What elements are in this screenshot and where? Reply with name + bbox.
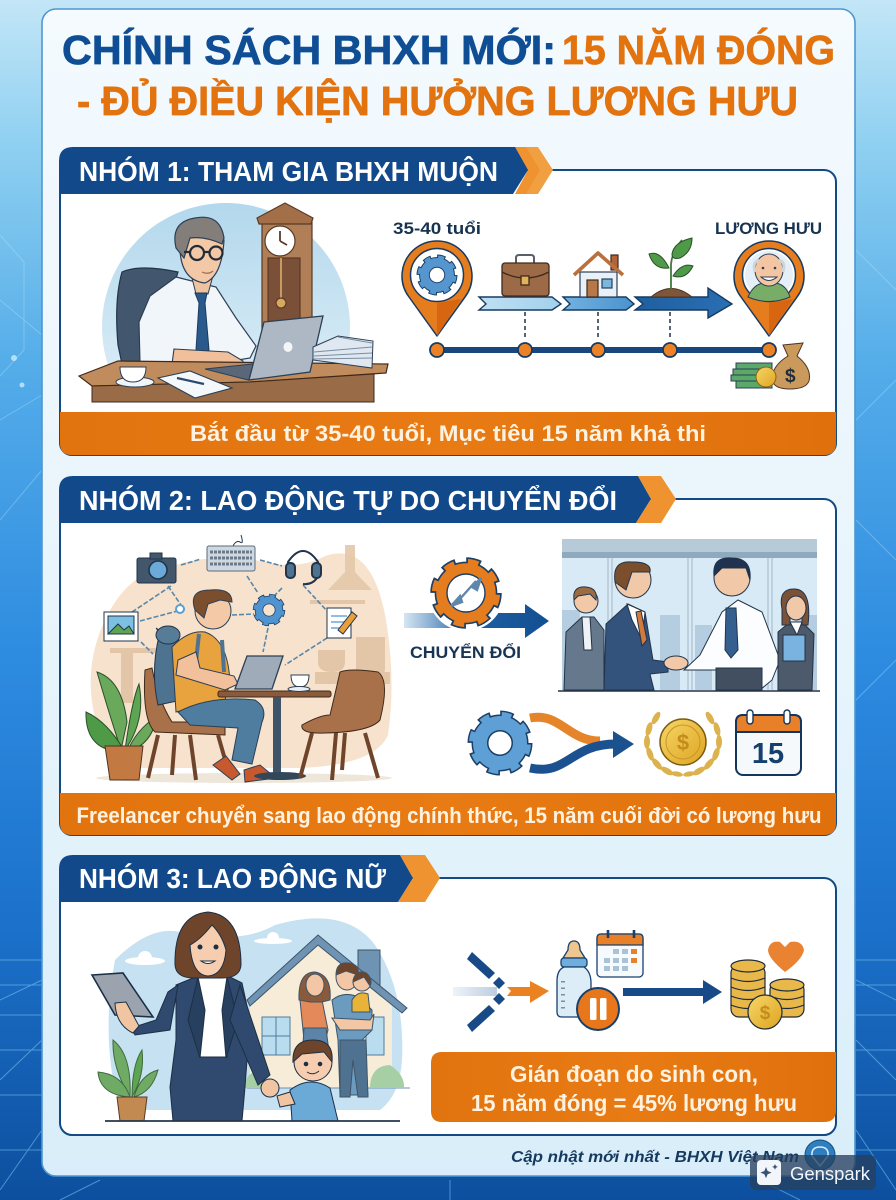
title: 15 NĂM ĐÓNG — [562, 27, 835, 73]
title: CHÍNH SÁCH BHXH MỚI: — [62, 27, 556, 73]
caption strip 1 — [60, 412, 836, 455]
watermark: genspark — [750, 1155, 876, 1190]
paper stack — [313, 336, 373, 368]
icon: gold coin with laurel — [644, 710, 722, 778]
plant — [98, 1040, 158, 1121]
dashed network — [132, 559, 328, 665]
header tab 1 — [59, 147, 553, 194]
coffee cup — [288, 675, 310, 692]
hand holding — [261, 1079, 279, 1097]
header tab 3: NHÓM 3: LAO ĐỘNG NỮ — [79, 862, 387, 894]
icon: gold coin with laurel: $ — [677, 730, 689, 755]
orange arrow — [507, 981, 549, 1003]
tablet — [92, 973, 153, 1017]
forearm — [172, 349, 243, 374]
notepad — [158, 371, 232, 398]
coffee cup — [116, 377, 154, 387]
arrow — [404, 604, 549, 638]
header tab 1: NHÓM 1: THAM GIA BHXH MUỘN — [79, 155, 498, 187]
clouds — [125, 932, 292, 965]
footer logo — [805, 1140, 835, 1170]
illustration: man at desk with clock — [78, 202, 389, 402]
caption box 3 — [431, 1052, 836, 1122]
chair — [117, 268, 178, 364]
shirt and torso — [139, 277, 256, 364]
jacket and skirt — [170, 976, 250, 1121]
label: lương hưu: LƯƠNG HƯU — [715, 219, 822, 238]
right arm — [230, 985, 270, 1085]
diverging lines — [467, 952, 505, 1032]
hair — [193, 590, 232, 618]
timeline line — [430, 343, 776, 357]
icon: coins and heart: $ — [760, 1003, 771, 1024]
icon: money and bag: $ — [785, 366, 796, 387]
left chair — [144, 668, 225, 735]
arm — [176, 652, 238, 690]
house — [245, 935, 410, 1088]
peach blob — [91, 553, 392, 768]
left arm — [131, 985, 178, 1035]
grandfather clock — [257, 203, 313, 334]
panel: nhóm 2 — [59, 476, 836, 835]
navy arrow — [623, 980, 722, 1004]
table — [218, 691, 331, 780]
icon: calendar 15: 15 — [752, 738, 784, 770]
blue blob — [109, 918, 402, 1110]
blouse — [198, 977, 227, 1057]
hub node — [176, 605, 184, 613]
panel: nhóm 1 — [59, 147, 836, 455]
icon: keyboard — [207, 535, 255, 571]
icon: house — [574, 253, 623, 297]
shoes — [213, 756, 240, 780]
boy — [277, 1040, 338, 1121]
illustration: working mother — [92, 912, 410, 1121]
label: chuyển đổi: CHUYỂN ĐỔI — [410, 643, 521, 662]
desk — [79, 361, 388, 386]
icon: gear — [256, 596, 282, 624]
icon: blue gear — [473, 716, 527, 770]
icon: camera — [137, 553, 176, 583]
header tab 2: NHÓM 2: LAO ĐỘNG TỰ DO CHUYỂN ĐỔI — [79, 484, 617, 516]
neck — [190, 270, 214, 294]
caption strip 1: Bắt đầu từ 35-40 tuổi, Mục tiêu 15 năm khả thi — [190, 421, 706, 446]
icon: briefcase — [502, 255, 549, 296]
icon: baby bottle — [557, 941, 591, 1017]
caption strip 2 — [60, 793, 836, 835]
icon: orange gear — [428, 555, 504, 631]
icon: pause — [577, 988, 619, 1030]
icon: money and bag — [731, 343, 810, 389]
handshake — [664, 656, 688, 670]
pin: gear — [402, 241, 472, 336]
icon: coins and heart — [731, 942, 804, 1029]
interruption diagram — [453, 930, 804, 1032]
header tab 3 — [59, 855, 440, 902]
dashed connectors — [525, 312, 670, 337]
ground shadow — [96, 773, 392, 783]
legs — [178, 699, 264, 764]
pin: retiree — [734, 241, 804, 336]
illustration: freelancer at cafe — [86, 535, 392, 783]
footer note: Cập nhật mới nhất - BHXH Việt Nam — [511, 1149, 799, 1166]
caption box 3: Gián đoạn do sinh con, — [510, 1061, 758, 1087]
conversion arrow group — [404, 555, 549, 662]
laptop — [235, 656, 283, 689]
header tab 2 — [59, 476, 676, 523]
merging arrows — [530, 717, 634, 769]
timeline diagram — [393, 219, 822, 389]
back left colleague — [564, 587, 604, 690]
glasses — [184, 246, 222, 260]
icon: picture — [104, 612, 138, 641]
caption strip 2: Freelancer chuyển sang lao động chính thức, 15 năm cuối đời có lương hưu — [76, 803, 822, 828]
main right man — [684, 558, 780, 690]
plant — [86, 672, 157, 780]
icon: sprout — [649, 238, 693, 297]
back right colleague — [778, 589, 814, 690]
face — [190, 925, 226, 976]
watermark: genspark: Genspark — [790, 1164, 871, 1184]
panel: nhóm 3 — [59, 855, 836, 1135]
label: 35-40 tuổi: 35-40 tuổi — [393, 219, 481, 238]
icon: document and pencil — [327, 608, 357, 638]
caption box 3: 15 năm đóng = 45% lương hưu — [471, 1090, 797, 1116]
hair — [175, 912, 241, 978]
illustration: handshake office — [558, 539, 820, 691]
icon: headset — [286, 551, 321, 584]
title: - ĐỦ ĐIỀU KIỆN HƯỞNG LƯƠNG HƯU — [77, 78, 798, 124]
torso: orange shirt — [172, 632, 230, 712]
head — [195, 593, 231, 629]
head — [180, 233, 224, 283]
merge diagram row — [473, 710, 801, 778]
icon: calendar — [597, 930, 643, 977]
title — [62, 27, 835, 124]
fading band — [453, 987, 497, 996]
icon: calendar 15 — [736, 710, 801, 775]
family — [299, 963, 374, 1097]
ribbon arrow — [479, 288, 732, 318]
main left man — [604, 562, 668, 690]
right chair — [300, 670, 385, 780]
hair — [175, 217, 224, 258]
woman — [92, 912, 279, 1121]
tie — [195, 293, 209, 354]
backpack — [154, 628, 182, 705]
laptop — [205, 364, 264, 380]
